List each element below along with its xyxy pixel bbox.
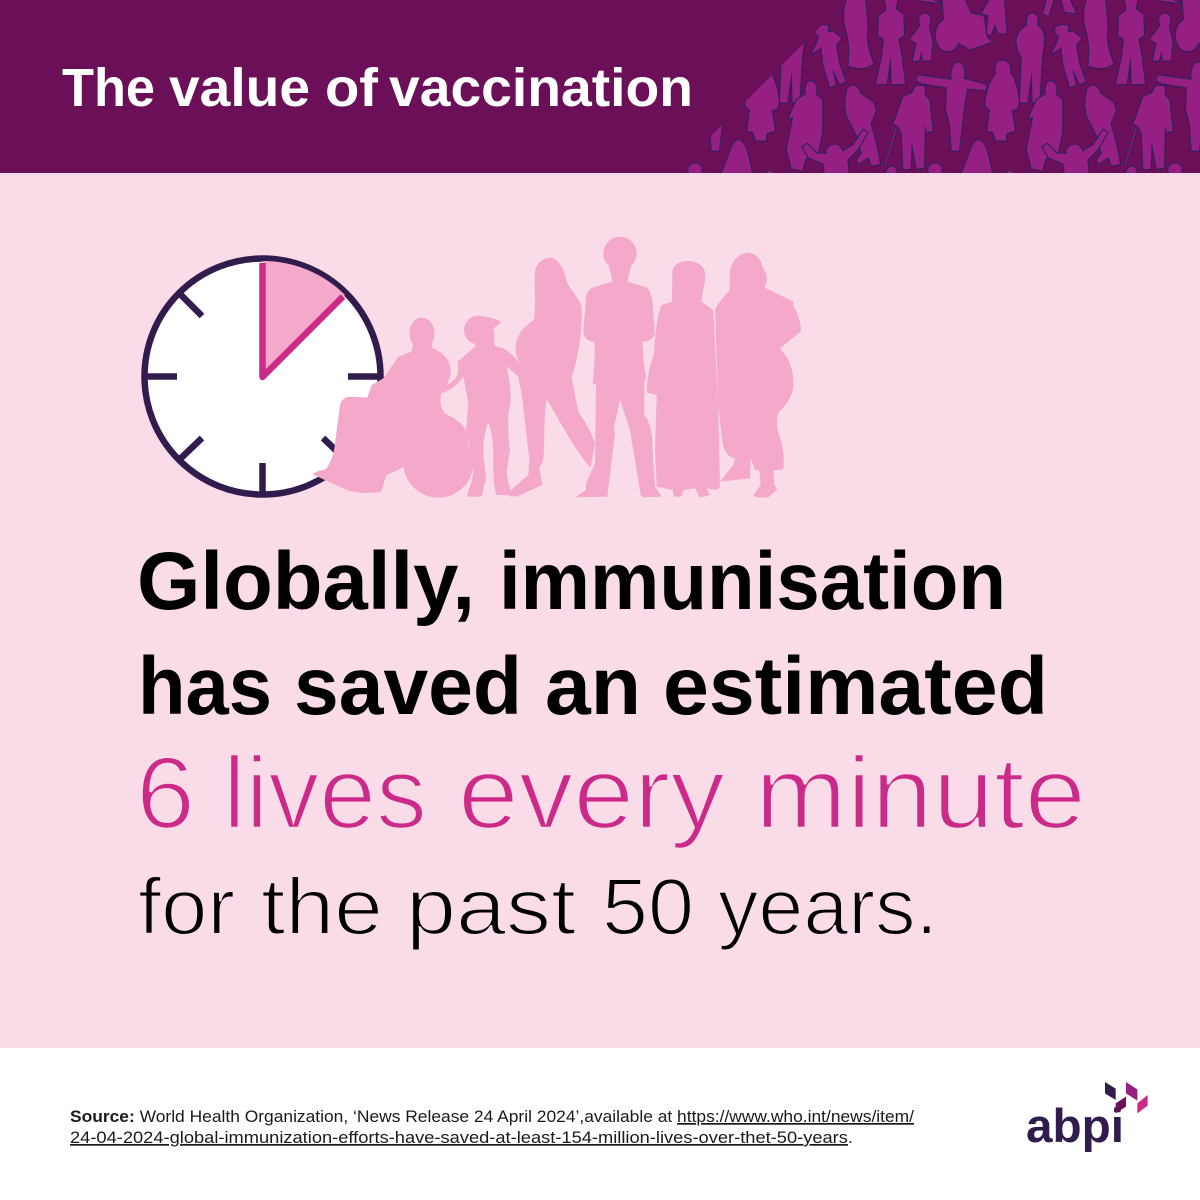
title xyxy=(62,58,693,118)
closing line: the xyxy=(261,862,383,951)
logo mark xyxy=(1105,1082,1148,1113)
closing line xyxy=(138,862,938,951)
header band xyxy=(0,0,1200,173)
clock hands xyxy=(262,263,343,377)
closing line: years. xyxy=(718,862,938,951)
main pink panel xyxy=(0,173,1200,1048)
one-minute pie segment xyxy=(262,261,345,376)
silhouette: man with folded arms xyxy=(575,237,662,497)
closing line: past xyxy=(406,862,576,951)
logo: abpi xyxy=(1026,1082,1148,1152)
clock ticks xyxy=(146,293,380,495)
highlight line: minute xyxy=(755,736,1086,850)
source line 1: Source: World Health Organization, ‘News Release 24 April 2024’,available at https://www.who.int/news/item/ xyxy=(70,1107,914,1126)
heading line 2: estimated xyxy=(663,641,1048,732)
clock face xyxy=(144,258,380,494)
source line 2: 24-04-2024-global-immunization-efforts-have-saved-at-least-154-million-lives-over-thet-50-years . xyxy=(70,1128,853,1147)
title: value xyxy=(169,58,310,118)
highlight line: lives xyxy=(223,736,427,850)
silhouette: person in wheelchair xyxy=(313,318,473,498)
highlight line xyxy=(136,736,1086,850)
icon: clock xyxy=(144,258,380,495)
heading line 1: Globally, xyxy=(137,536,475,627)
title: vaccination xyxy=(389,58,693,118)
closing line: 50 xyxy=(602,862,694,951)
heading line 1: immunisation xyxy=(499,536,1006,627)
silhouette: woman in hijab xyxy=(647,261,720,497)
silhouette: child with cap xyxy=(442,316,530,497)
heading line 1 xyxy=(137,536,1006,627)
heading line 2 xyxy=(138,641,1048,732)
closing line: for xyxy=(138,862,235,951)
title: of xyxy=(325,58,379,118)
source citation xyxy=(70,1107,914,1147)
main statement xyxy=(136,536,1086,951)
highlight line: every xyxy=(458,736,725,850)
heading line 2: saved xyxy=(294,641,522,732)
title: The xyxy=(62,58,155,118)
silhouette: pregnant woman xyxy=(508,258,595,497)
header people pattern xyxy=(687,0,1200,173)
highlight line: 6 xyxy=(136,736,195,850)
heading line 2: an xyxy=(545,641,641,732)
heading line 2: has xyxy=(138,641,272,732)
silhouettes: group of people xyxy=(313,237,801,498)
logo wordmark: abpi xyxy=(1026,1099,1124,1152)
silhouette: woman with hand on hip xyxy=(715,253,801,497)
